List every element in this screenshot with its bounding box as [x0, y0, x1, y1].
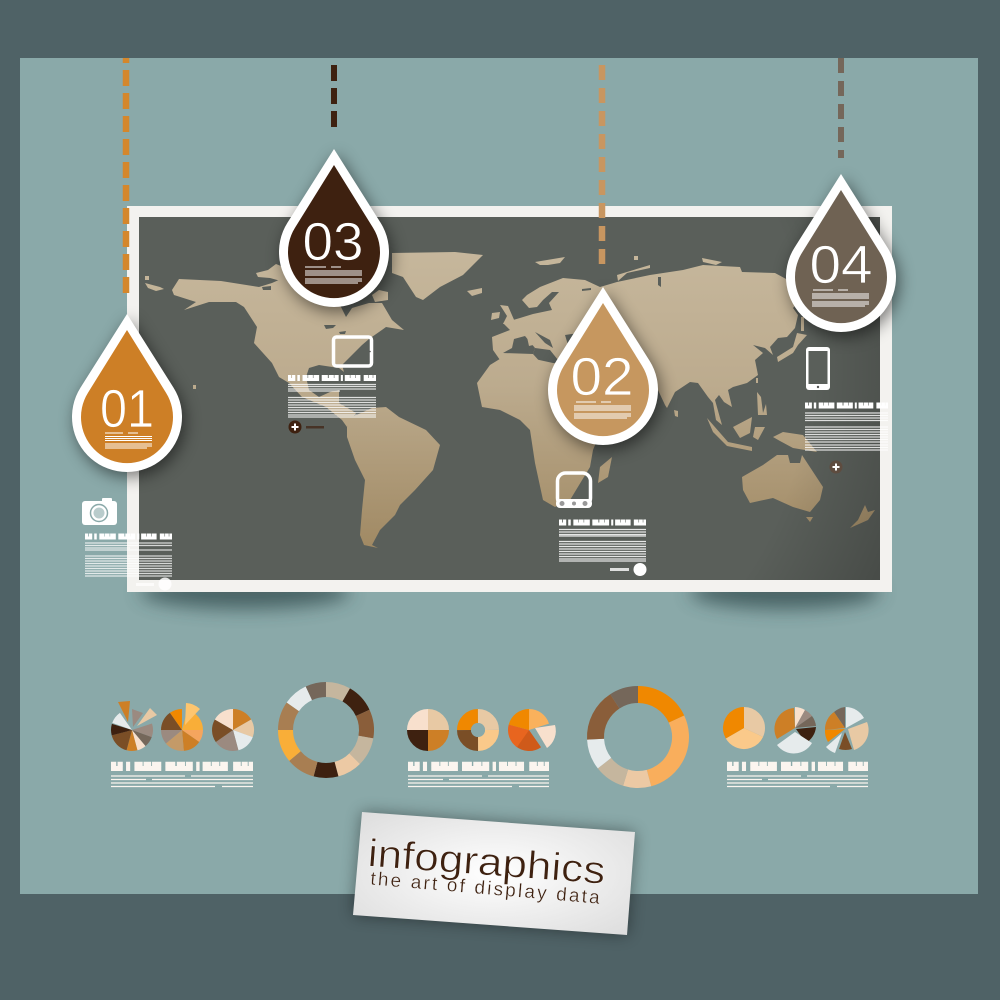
south america: [347, 407, 440, 548]
droplet text 02: [574, 402, 631, 418]
icon: smartphone: [806, 347, 830, 390]
map vignette: [139, 217, 880, 580]
italy: [527, 337, 533, 346]
number 01: 01: [100, 379, 154, 439]
panel: map frame: [127, 206, 892, 592]
new zealand: [850, 505, 875, 528]
north america: [172, 275, 404, 427]
pie 2: [167, 703, 200, 745]
eurasia: [492, 265, 800, 425]
droplet text 04: [812, 290, 869, 306]
hawaii: [193, 385, 196, 389]
more button: camera: [136, 578, 172, 590]
ireland and britain: [491, 312, 500, 320]
text block: music player: [559, 521, 646, 561]
seas: [262, 277, 661, 366]
pie 8: [774, 707, 816, 753]
number 04: 04: [809, 235, 873, 295]
japan and sakhalin: [777, 333, 807, 362]
icon: music player: [556, 473, 592, 508]
indonesia: [707, 418, 752, 451]
greenland: [392, 252, 483, 300]
droplet 01: [72, 314, 185, 477]
title card: [353, 812, 635, 935]
icon: tablet: [334, 337, 372, 366]
text block: smartphone: [805, 404, 888, 450]
more button: music player: [610, 563, 646, 576]
droplet 03: [279, 149, 392, 312]
pie 5: [464, 716, 492, 744]
plus button: tablet: [288, 420, 324, 434]
dashed line 01: [123, 58, 129, 295]
plus button: smartphone: [830, 460, 842, 474]
pie 4: [418, 720, 438, 740]
number 02: 02: [570, 347, 634, 407]
africa: [477, 357, 610, 507]
number 03: 03: [302, 212, 364, 272]
pie 6: [514, 715, 556, 748]
aleutian: [145, 276, 164, 291]
chart caption 2: [408, 764, 549, 786]
title text: infographics: [366, 832, 607, 893]
droplet text 01: [105, 433, 152, 448]
pie 7: [730, 714, 758, 742]
dashed line 04: [838, 58, 844, 158]
donut 2: [578, 677, 698, 797]
iceland: [467, 288, 482, 296]
pie 9: [825, 707, 869, 753]
chart caption 3: [727, 764, 868, 786]
canadian arctic islands: [256, 264, 288, 283]
svalbard and arctic: [535, 257, 565, 265]
text block: camera: [85, 535, 172, 576]
dashed line 02: [599, 65, 605, 266]
text block: tablet: [288, 376, 376, 417]
dashed line 03: [331, 65, 337, 127]
chart caption 1: [111, 764, 253, 786]
arabia: [575, 355, 640, 425]
pie 1: [117, 701, 157, 745]
donut 1: [269, 673, 383, 787]
icon: camera: [82, 498, 117, 525]
droplet 02: [548, 287, 661, 450]
droplet text 03: [305, 267, 362, 283]
australia: [742, 455, 823, 512]
pie 5 hole: [471, 723, 485, 737]
madagascar: [598, 457, 612, 483]
droplet 04: [786, 174, 899, 337]
sri lanka and taiwan: [674, 378, 758, 417]
pie 3: [218, 715, 248, 745]
frame shadows: [140, 575, 880, 609]
world map: [145, 252, 875, 548]
map background: [139, 217, 880, 580]
subtitle text: the art of display data: [370, 869, 601, 909]
